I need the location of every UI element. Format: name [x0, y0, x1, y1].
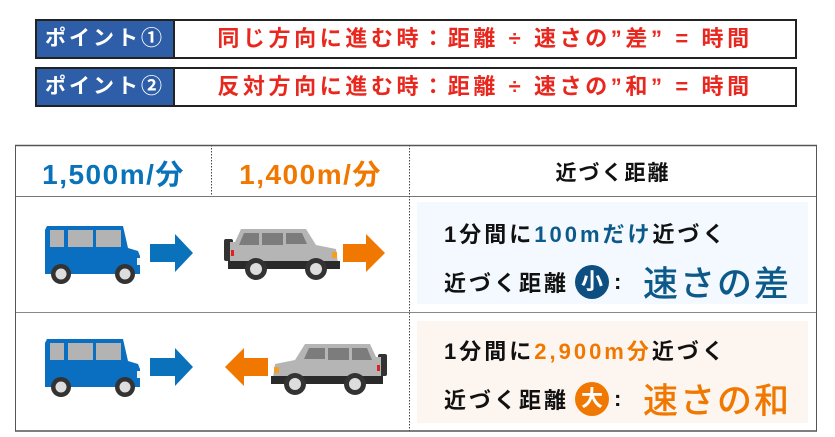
point 2 bar: 反対方向に進む時：距離 ÷ 速さの”和” = 時間: [217, 74, 753, 99]
panel: same direction result: 小: [581, 269, 603, 294]
point 2 bar: [35, 67, 797, 107]
panel: same direction result: [417, 202, 808, 304]
icon: blue van row 2: [45, 339, 140, 397]
text: approach 100m: 1分間に100mだけ近づく: [444, 222, 728, 247]
point 1 bar: ポイント①: [45, 27, 165, 50]
arrow: blue right row 1: [150, 234, 193, 272]
panel: opposite direction result: 大: [581, 386, 603, 411]
icon: blue van row 1: [45, 226, 140, 284]
point 1 bar: 同じ方向に進む時：距離 ÷ 速さの”差” = 時間: [217, 26, 753, 51]
header: distance: 近づく距離: [556, 162, 670, 185]
arrow: orange right row 1: [343, 234, 385, 272]
panel: same direction result: :: [614, 269, 624, 294]
text: small distance = speed difference: 近づく距離: [444, 271, 569, 296]
arrow: blue right row 2: [150, 348, 193, 386]
panel: opposite direction result: [417, 321, 808, 423]
text: approach 2900m: 1分間に2,900m分近づく: [444, 339, 727, 364]
panel: same direction result: 速さの差: [643, 265, 791, 304]
header: speed blue: 1,500m/分: [42, 159, 185, 190]
panel: opposite direction result: 速さの和: [643, 382, 791, 421]
header: speed orange: 1,400m/分: [239, 159, 382, 190]
text: large distance = speed sum: 近づく距離: [444, 388, 569, 413]
panel: opposite direction result: :: [614, 386, 624, 411]
icon: grey suv row 1: [224, 229, 340, 280]
arrow: orange left row 2: [225, 348, 268, 386]
icon: grey suv row 2 (facing left): [271, 344, 387, 395]
point 2 bar: ポイント②: [45, 75, 165, 98]
point 1 bar: [35, 19, 797, 59]
